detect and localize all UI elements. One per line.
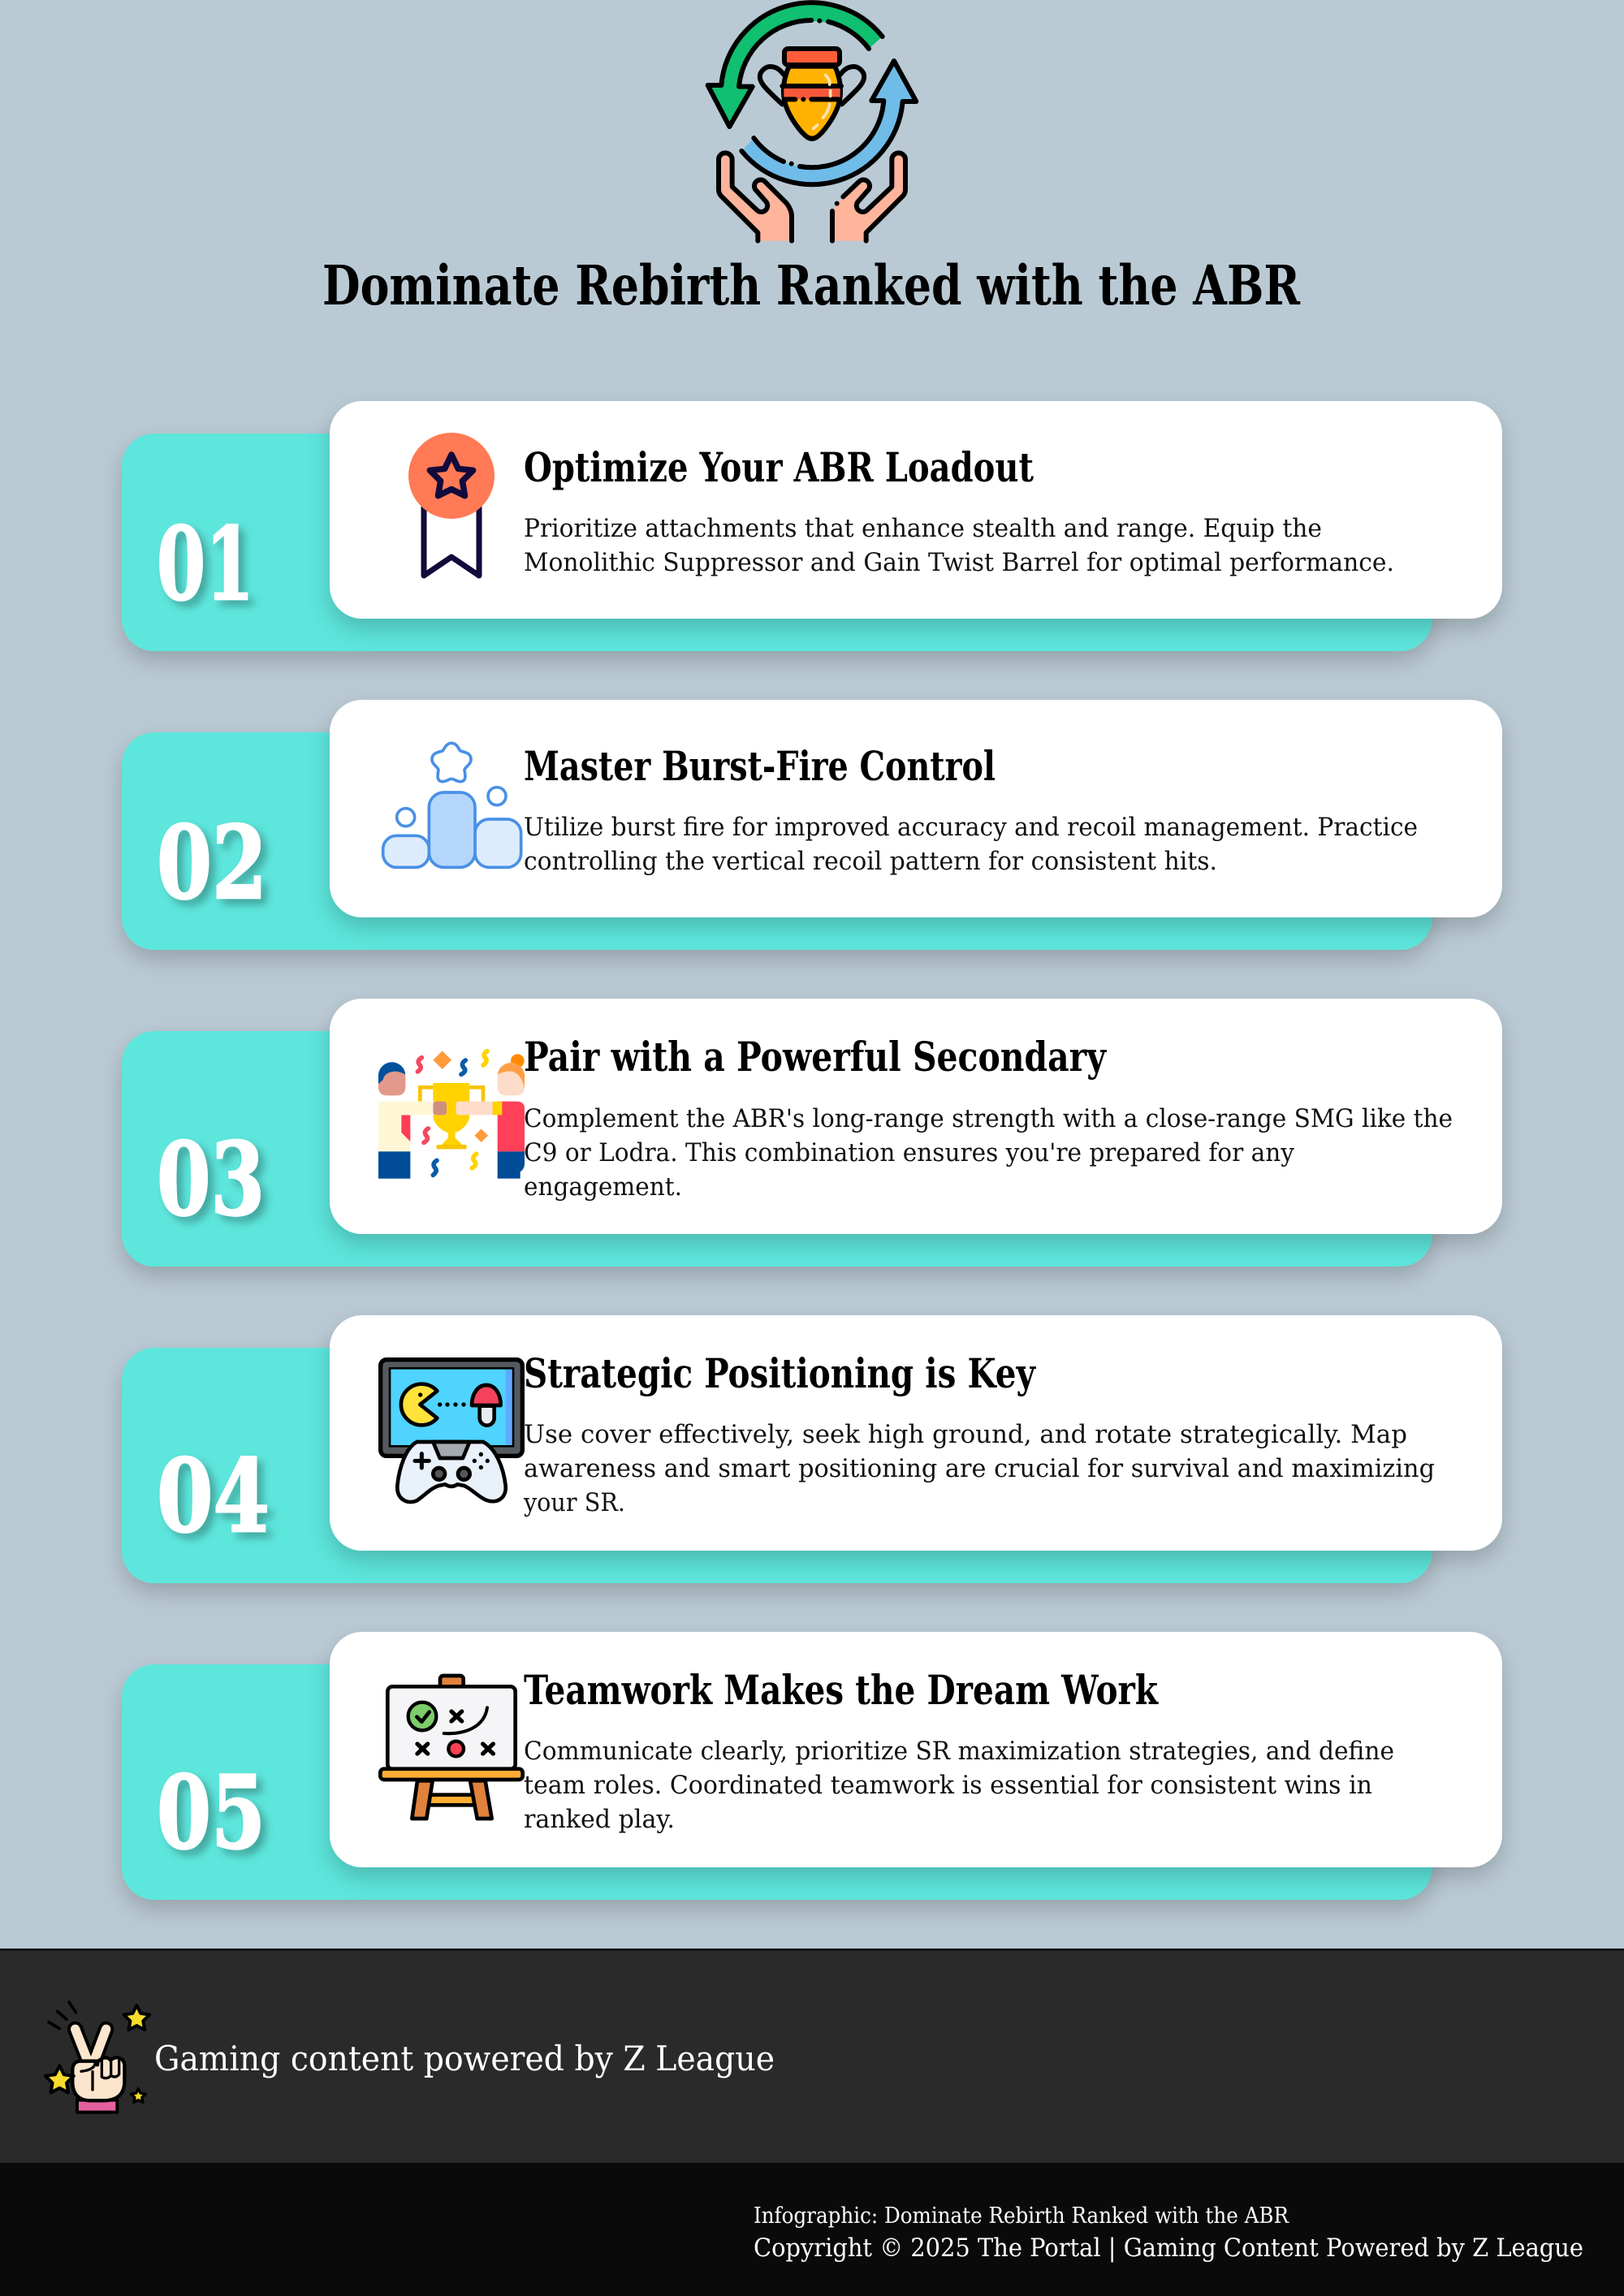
blue arrow <box>741 61 916 184</box>
icon: monitor and controller <box>381 1360 522 1502</box>
number 05: 05 <box>157 1754 266 1872</box>
monitor <box>381 1360 522 1456</box>
body 05: team roles. Coordinated teamwork is essential for consistent wins in <box>524 1771 1372 1800</box>
number tab 05 <box>122 1664 1432 1900</box>
body 01 <box>524 514 1394 577</box>
footer text: Gaming content powered by Z League <box>154 2039 775 2078</box>
green arrow <box>708 2 883 127</box>
controller <box>397 1442 506 1502</box>
number 04: 04 <box>157 1438 270 1556</box>
number 01: 01 <box>157 506 254 624</box>
right hand <box>832 153 905 241</box>
easel legs <box>412 1780 492 1819</box>
body 02: controlling the vertical recoil pattern for consistent hits. <box>524 847 1217 876</box>
card 03 <box>330 999 1502 1234</box>
body 02 <box>524 813 1418 876</box>
wrist <box>77 2100 117 2113</box>
panel: step 02 <box>122 700 1502 950</box>
body 05: Communicate clearly, prioritize SR maximization strategies, and define <box>524 1737 1394 1766</box>
card 01 <box>330 401 1502 619</box>
heading 05: Teamwork Makes the Dream Work <box>524 1666 1159 1714</box>
left hand <box>719 153 792 241</box>
board <box>387 1686 516 1769</box>
number tab 02 <box>122 732 1432 950</box>
card 04 <box>330 1315 1502 1551</box>
panel: step 04 <box>122 1315 1502 1583</box>
card 02 <box>330 700 1502 917</box>
icon: trophy and people <box>378 1051 525 1179</box>
body 05: ranked play. <box>524 1805 675 1834</box>
panel: step 05 <box>122 1632 1502 1900</box>
title: Dominate Rebirth Ranked with the ABR <box>322 253 1301 317</box>
icon: peace hand and stars <box>45 2002 149 2113</box>
left person <box>378 1062 410 1179</box>
heading 03: Pair with a Powerful Secondary <box>524 1033 1108 1081</box>
mushroom <box>472 1385 501 1426</box>
number tab 04 <box>122 1348 1432 1583</box>
copyright line 2: Copyright © 2025 The Portal | Gaming Content Powered by Z League <box>754 2233 1583 2263</box>
number 02: 02 <box>157 805 267 922</box>
ledge <box>380 1769 523 1780</box>
body 02: Utilize burst fire for improved accuracy and recoil management. Practice <box>524 813 1418 842</box>
vase <box>760 49 864 139</box>
body 04: your SR. <box>523 1488 625 1517</box>
number 03: 03 <box>157 1121 265 1239</box>
stars <box>123 2005 149 2030</box>
body 04 <box>523 1420 1435 1517</box>
heading 02: Master Burst-Fire Control <box>524 742 996 790</box>
rays <box>49 2002 76 2029</box>
panel: step 03 <box>122 999 1502 1267</box>
body 05 <box>524 1737 1394 1834</box>
copyright band <box>0 2163 1624 2296</box>
icon: podium <box>383 743 521 867</box>
fingers <box>76 2029 106 2060</box>
pacman <box>401 1384 437 1425</box>
body 04: awareness and smart positioning are crucial for survival and maximizing <box>524 1454 1435 1483</box>
body 01: Monolithic Suppressor and Gain Twist Barrel for optimal performance. <box>524 548 1394 577</box>
heading 04: Strategic Positioning is Key <box>524 1349 1037 1397</box>
body 03: Complement the ABR's long-range strength with a close-range SMG like the <box>524 1104 1453 1133</box>
number tab 03 <box>122 1031 1432 1267</box>
icon: medal <box>408 433 495 576</box>
body 04: Use cover effectively, seek high ground, and rotate strategically. Map <box>524 1420 1407 1449</box>
body 03: C9 or Lodra. This combination ensures you're prepared for any <box>524 1138 1294 1167</box>
arms <box>390 1102 494 1115</box>
icon: strategy easel <box>380 1676 523 1819</box>
panel: step 01 <box>122 401 1502 651</box>
body 03: engagement. <box>524 1172 682 1202</box>
copyright line 1: Infographic: Dominate Rebirth Ranked with the ABR <box>754 2203 1289 2229</box>
confetti <box>417 1051 487 1175</box>
body 03 <box>524 1104 1453 1202</box>
heading 01: Optimize Your ABR Loadout <box>524 443 1034 491</box>
palm <box>72 2057 124 2100</box>
trophy <box>420 1083 483 1149</box>
diamonds <box>433 1051 488 1142</box>
icon: recycling vase and hands <box>708 2 916 241</box>
footer band <box>0 1949 1624 2163</box>
body 01: Prioritize attachments that enhance stealth and range. Equip the <box>524 514 1322 543</box>
card 05 <box>330 1632 1502 1867</box>
right person <box>493 1054 525 1179</box>
number tab 01 <box>122 434 1432 651</box>
